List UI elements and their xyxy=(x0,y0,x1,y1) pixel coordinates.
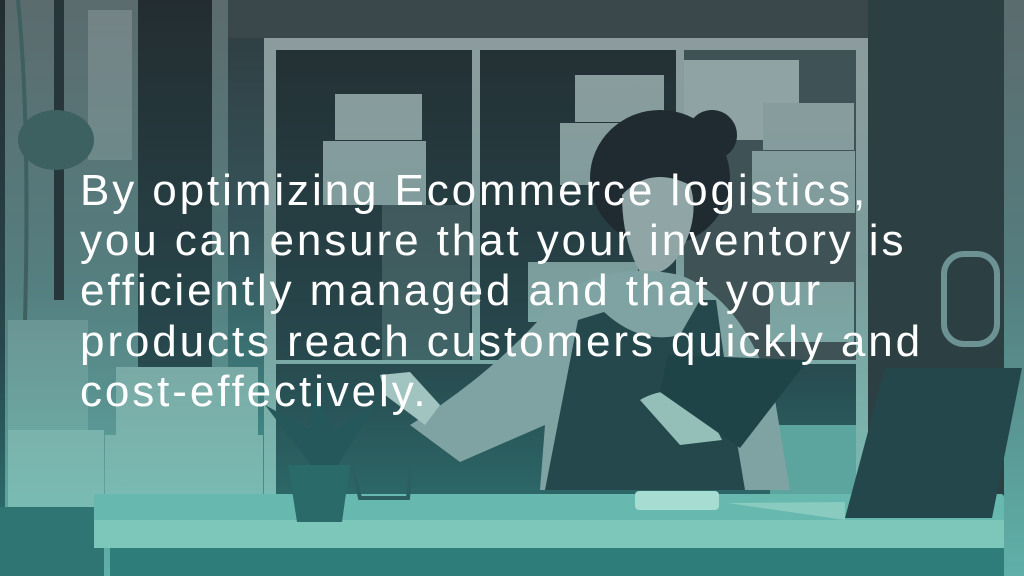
quote text: efficiently managed and that your xyxy=(80,266,823,315)
quote text: By optimizing Ecommerce logistics, xyxy=(80,166,868,215)
parcels on shelves xyxy=(323,75,855,360)
laptop and device xyxy=(635,368,1022,520)
quote text: products reach customers quickly and xyxy=(80,317,923,366)
quote text: cost-effectively. xyxy=(80,367,428,416)
shelving unit xyxy=(264,38,868,508)
foreground parcels, left xyxy=(8,320,263,524)
quote text: you can ensure that your inventory is xyxy=(80,216,906,265)
quote text xyxy=(80,166,923,416)
top wall band xyxy=(228,0,868,38)
person xyxy=(380,110,808,490)
left window xyxy=(0,0,228,576)
table edge xyxy=(0,494,1004,576)
potted plant and mini trolley xyxy=(265,395,412,522)
right door and frame xyxy=(868,0,1024,576)
